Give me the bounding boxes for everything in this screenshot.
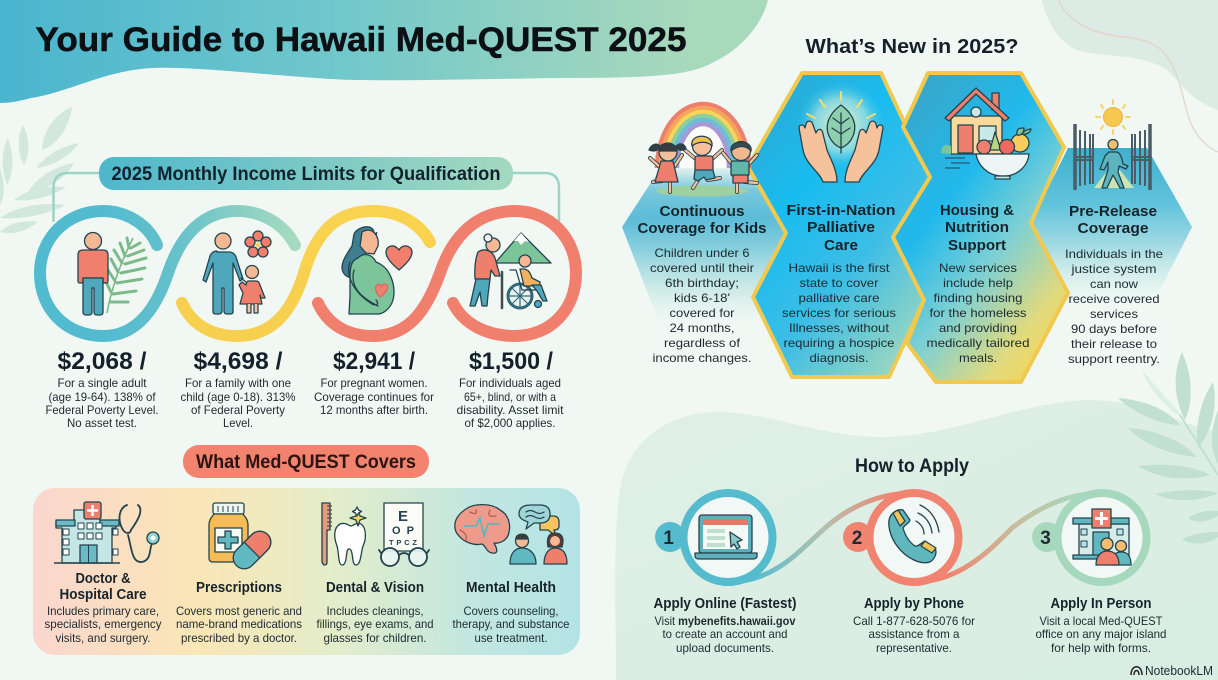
income stat 3: For pregnant women. — [320, 376, 428, 390]
icon: house and fruit bowl — [941, 88, 1031, 179]
step 3 text: Apply In Person — [1050, 596, 1152, 612]
income stat 4: of $2,000 applies. — [464, 416, 556, 430]
coverage item: dental and vision: glasses for children. — [324, 631, 426, 645]
new item 4: pre-release coverage: services — [1090, 307, 1138, 321]
new item 3: housing and nutrition: for the homeless — [930, 306, 1026, 320]
new item 4: pre-release coverage: Pre-Release — [1069, 204, 1157, 220]
coverage item: dental and vision — [316, 580, 434, 645]
new item 2: palliative care: Care — [824, 238, 858, 254]
new item 2: palliative care: services for serious — [782, 306, 896, 320]
income stat 4: For individuals aged — [459, 376, 561, 390]
new item 4: pre-release coverage: Coverage — [1078, 221, 1148, 237]
income stat 2: child (age 0-18). 313% — [180, 390, 296, 404]
new item 3: housing and nutrition: and providing — [939, 321, 1017, 335]
step 2 text: Apply by Phone — [864, 596, 964, 612]
new item 2: palliative care: Hawaii is the first — [788, 261, 890, 275]
connector step 2 to 3 — [914, 493, 1102, 582]
coverage item: mental health: Mental Health — [466, 580, 556, 596]
new item 4: pre-release coverage: support reentry. — [1068, 352, 1160, 366]
children limbs — [650, 150, 757, 192]
income stat 1: For a single adult — [58, 376, 147, 390]
income stat 2: $4,698 / — [194, 348, 283, 375]
hexagon 3 background — [893, 73, 1068, 382]
coverage item: prescriptions: prescribed by a doctor. — [181, 631, 297, 645]
coverage item: prescriptions — [176, 580, 302, 645]
step 1 text — [654, 596, 797, 655]
new item 1: continuous coverage: covered until their — [650, 261, 754, 275]
coverage item: doctor and hospital care: Includes primary care, — [47, 604, 159, 618]
step 3 circle and clinic — [1032, 493, 1146, 582]
new item 2: palliative care: Illnesses, without — [789, 321, 890, 335]
heading pill: 2025 Monthly Income Limits for Qualification — [112, 164, 500, 185]
step 1 text: upload documents. — [676, 641, 774, 655]
coverage item: dental and vision: Dental & Vision — [326, 580, 424, 596]
new item 1: continuous coverage: 6th birthday; — [665, 276, 739, 290]
step 2 text: assistance from a — [868, 627, 960, 641]
icon: toothbrush, tooth and eye chart — [322, 503, 429, 566]
new item 1: continuous coverage: covered for — [670, 306, 735, 320]
coverage item: doctor and hospital care — [44, 571, 162, 645]
icon: toothbrush, tooth and eye chart: TPCZ — [389, 538, 417, 547]
step 1 text: Apply Online (Fastest) — [654, 596, 797, 612]
heading: How to Apply — [855, 456, 969, 477]
step 2 text — [853, 596, 975, 655]
step 3 text — [1036, 596, 1166, 655]
step 1 circle and laptop — [655, 493, 772, 582]
new item 4: pre-release coverage — [1065, 204, 1163, 366]
coverage panel — [33, 488, 580, 655]
new item 1: continuous coverage — [638, 204, 766, 365]
income stat 2: Level. — [223, 416, 253, 430]
coverage item: doctor and hospital care: Doctor & — [76, 571, 131, 587]
coverage item: doctor and hospital care: visits, and surgery. — [56, 631, 150, 645]
icon: rainbow and children — [649, 102, 757, 196]
new item 1: continuous coverage: Continuous — [660, 204, 744, 220]
right leaf decoration — [1118, 352, 1218, 544]
income stat 3: Coverage continues for — [314, 390, 434, 404]
coverage item: doctor and hospital care: specialists, emergency — [44, 617, 162, 631]
icon: senior and wheelchair user with mountain — [470, 233, 551, 308]
new item 2: palliative care: requiring a hospice — [784, 336, 895, 350]
new item 3: housing and nutrition: include help — [943, 276, 1013, 290]
new item 1: continuous coverage: income changes. — [652, 351, 752, 365]
new item 1: continuous coverage: kids 6-18' — [674, 291, 730, 305]
icon: hospital and stethoscope — [54, 502, 159, 563]
income stat 4: $1,500 / — [469, 348, 553, 375]
step 1 text: to create an account and — [662, 627, 788, 641]
income stat 4 — [456, 348, 564, 430]
icon: prescription bottle and capsule — [209, 503, 275, 573]
section: income limits — [40, 157, 576, 430]
income stat 4: disability. Asset limit — [456, 403, 564, 417]
heading pill — [99, 157, 513, 190]
step 3 circle and clinic: 3 — [1040, 528, 1051, 549]
income stat 1: $2,068 / — [58, 348, 147, 375]
new item 4: pre-release coverage: can now — [1090, 277, 1138, 291]
icon: single adult with palm — [78, 232, 146, 315]
step 2 circle and phone: 2 — [852, 528, 862, 549]
bottom-right background blob — [615, 400, 1218, 680]
hexagon 2 background — [748, 73, 930, 377]
connector lines — [54, 173, 559, 228]
new item 4: pre-release coverage: justice system — [1070, 262, 1156, 276]
new item 4: pre-release coverage: their release to — [1071, 337, 1157, 351]
step 1 circle and laptop: 1 — [663, 528, 674, 549]
icon: brain and counseling — [455, 505, 567, 564]
new item 4: pre-release coverage: 90 days before — [1071, 322, 1157, 336]
new item 2: palliative care: palliative care — [798, 291, 880, 305]
new item 1: continuous coverage: regardless of — [664, 336, 741, 350]
coverage item: prescriptions: Covers most generic and — [176, 604, 302, 618]
icon: toothbrush, tooth and eye chart: O P — [392, 525, 414, 537]
income stat 3 — [314, 348, 434, 417]
new item 3: housing and nutrition: Support — [948, 238, 1006, 254]
new item 3: housing and nutrition: New services — [939, 261, 1017, 275]
income stat 3: $2,941 / — [333, 348, 415, 375]
new item 3: housing and nutrition: finding housing — [934, 291, 1022, 305]
new item 3: housing and nutrition: meals. — [959, 351, 997, 365]
NotebookLM watermark: NotebookLM — [1145, 663, 1213, 678]
income stat 1: Federal Poverty Level. — [46, 403, 158, 417]
coverage item: mental health: use treatment. — [474, 631, 548, 645]
step 3 text: office on any major island — [1036, 627, 1166, 641]
income stat 2: For a family with one — [185, 376, 291, 390]
income stat 1: (age 19-64). 138% of — [48, 390, 156, 404]
coverage item: dental and vision: Includes cleanings, — [326, 604, 424, 618]
new item 1: continuous coverage: Children under 6 — [654, 246, 750, 260]
coverage item: mental health — [452, 580, 570, 645]
coverage item: mental health: therapy, and substance — [452, 617, 570, 631]
new item 2: palliative care: state to cover — [800, 276, 878, 290]
top-right tan line — [1059, 0, 1218, 152]
income stat 3: 12 months after birth. — [320, 403, 428, 417]
income stat 1 — [46, 348, 158, 430]
coverage item: prescriptions: Prescriptions — [196, 580, 282, 596]
new item 3: housing and nutrition — [926, 203, 1030, 365]
step 3 text: for help with forms. — [1051, 641, 1151, 655]
icon: toothbrush, tooth and eye chart: E — [398, 508, 408, 525]
step 2 text: Call 1-877-628-5076 for — [853, 614, 975, 628]
income stat 4: 65+, blind, or with a — [464, 390, 556, 404]
icon: open gate, sun and walker — [1075, 100, 1150, 190]
left leaf decoration — [0, 107, 79, 233]
new item 1: continuous coverage: Coverage for Kids — [638, 221, 766, 237]
connector step 1 to 2 — [728, 493, 914, 582]
icon: parent and child with flower — [203, 231, 271, 314]
coverage item: mental health: Covers counseling, — [464, 604, 558, 618]
income stat 1: No asset test. — [67, 416, 137, 430]
icon: pregnant woman with hearts — [342, 227, 412, 314]
new item 2: palliative care — [782, 203, 896, 365]
section: what Med-QUEST covers — [33, 445, 580, 655]
new item 3: housing and nutrition: medically tailored — [926, 336, 1030, 350]
icon: hands holding leaf — [797, 81, 885, 182]
new item 3: housing and nutrition: Nutrition — [945, 220, 1009, 236]
new item 2: palliative care: diagnosis. — [810, 351, 868, 365]
coverage item: prescriptions: name-brand medications — [176, 617, 302, 631]
title banner — [0, 0, 768, 103]
new item 4: pre-release coverage: Individuals in the — [1065, 247, 1163, 261]
hexagon 1 background — [622, 150, 800, 330]
new item 2: palliative care: Palliative — [807, 220, 875, 236]
income stat 2: of Federal Poverty — [191, 403, 285, 417]
hexagon 4 background — [1031, 148, 1192, 310]
new item 2: palliative care: First-in-Nation — [786, 203, 896, 219]
step 1 text: Visit mybenefits.hawaii.gov — [654, 614, 796, 628]
step 2 circle and phone — [843, 493, 958, 582]
title: Your Guide to Hawaii Med-QUEST 2025 — [36, 21, 686, 59]
new item 4: pre-release coverage: receive covered — [1068, 292, 1160, 306]
new item 3: housing and nutrition: Housing & — [940, 203, 1015, 219]
coverage item: doctor and hospital care: Hospital Care — [60, 587, 146, 603]
coverage item: dental and vision: fillings, eye exams, and — [316, 617, 434, 631]
section: what's new — [622, 36, 1192, 382]
heading pill: What Med-QUEST Covers — [196, 452, 416, 473]
ribbon wave — [40, 211, 576, 336]
step 3 text: Visit a local Med-QUEST — [1040, 614, 1163, 628]
new item 1: continuous coverage: 24 months, — [670, 321, 734, 335]
top-right corner blob — [1042, 0, 1218, 110]
heading pill — [183, 445, 429, 478]
income stat 2 — [180, 348, 296, 430]
section: how to apply — [654, 456, 1166, 655]
heading: What’s New in 2025? — [806, 36, 1018, 58]
step 2 text: representative. — [876, 641, 952, 655]
